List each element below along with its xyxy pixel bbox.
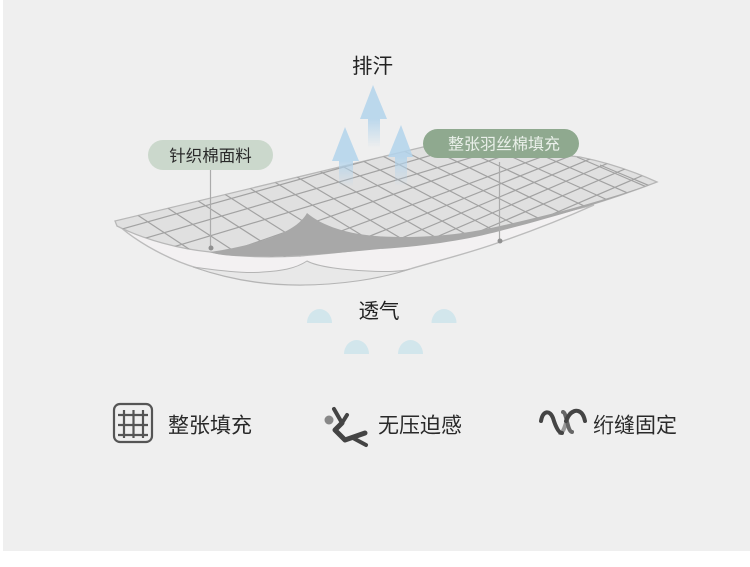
callout: 针织棉面料: 针织棉面料 — [169, 146, 252, 166]
feature: 整张填充: 整张填充 — [168, 414, 252, 438]
feature: 无压迫感: 无压迫感 — [378, 414, 462, 438]
arrow: centre — [360, 85, 387, 148]
arrow: right — [388, 125, 413, 186]
heading: 透气: 透气 — [358, 300, 400, 323]
icon: stitching waves — [541, 411, 585, 433]
folded dark underside flap — [210, 182, 657, 257]
icon: grid — [114, 404, 152, 442]
callout: 针织棉面料 — [148, 140, 273, 250]
feature: 绗缝固定 — [541, 411, 677, 438]
callout: 整张羽丝棉填充 — [423, 129, 579, 244]
sweat arrows — [332, 85, 413, 187]
callout: 整张羽丝棉填充: 整张羽丝棉填充 — [448, 136, 560, 154]
heading: 排汗: 排汗 — [352, 55, 393, 78]
arrow: left — [332, 127, 359, 187]
breathable semicircles — [307, 309, 456, 354]
quilt illustration — [114, 146, 658, 286]
top quilted surface — [114, 146, 658, 258]
feature: 绗缝固定: 绗缝固定 — [593, 414, 677, 438]
white filling layer — [117, 205, 594, 285]
icon: reclining person — [324, 409, 366, 445]
feature: 整张填充 — [114, 404, 252, 442]
lower fabric layer — [193, 261, 410, 285]
feature: 无压迫感 — [324, 409, 462, 445]
